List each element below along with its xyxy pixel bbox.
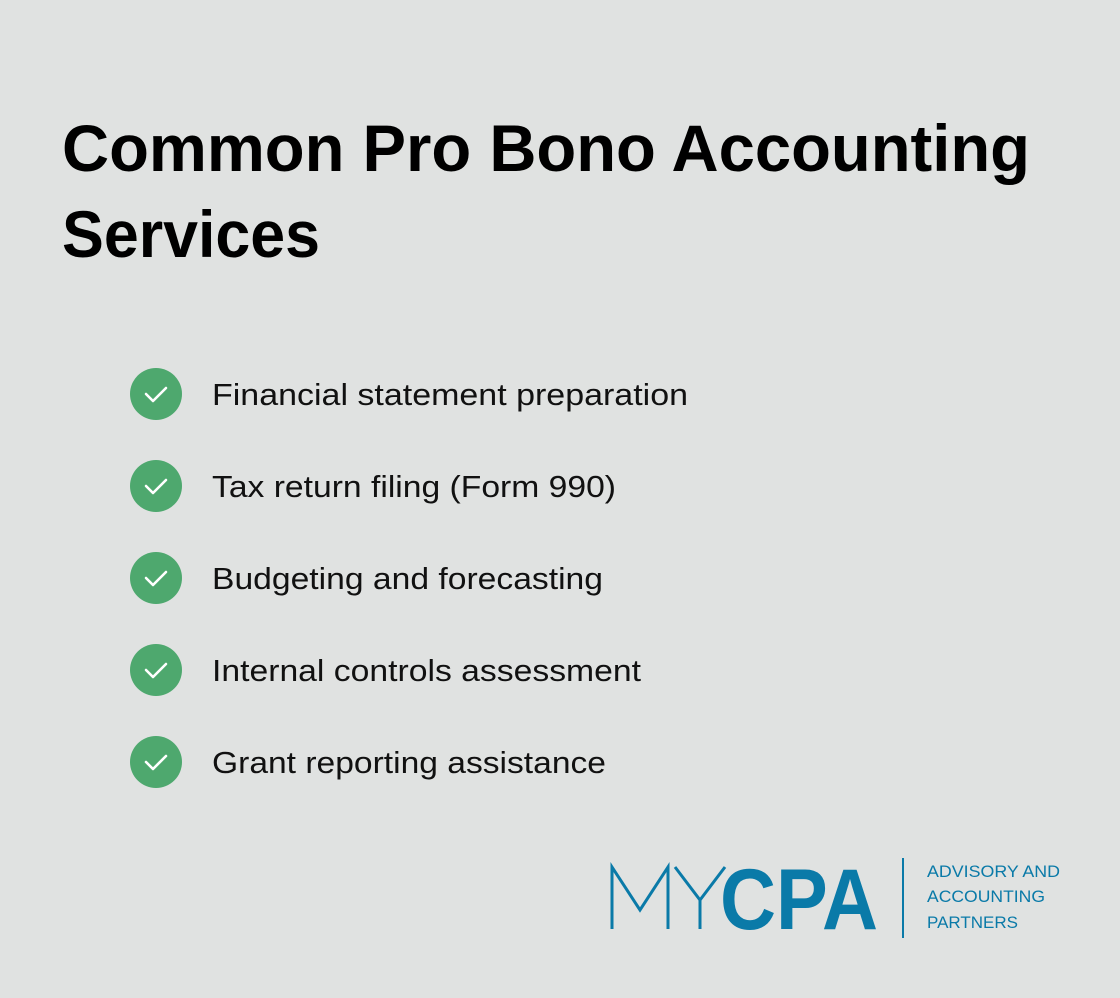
item: Grant reporting assistance: Grant reporting assistance	[212, 745, 606, 780]
logo: tagline	[927, 862, 1060, 932]
title: Common Pro Bono Accounting	[62, 111, 1030, 185]
logo: tagline: PARTNERS	[927, 913, 1018, 932]
item: Budgeting and forecasting: Budgeting and forecasting	[212, 561, 603, 596]
logo: tagline: ACCOUNTING	[927, 887, 1045, 906]
logo	[612, 852, 1060, 948]
logo: CPA: CPA	[720, 852, 878, 948]
item: Financial statement preparation	[130, 368, 688, 420]
title	[62, 111, 1030, 271]
item: Budgeting and forecasting	[130, 552, 603, 604]
item: Financial statement preparation: Financial statement preparation	[212, 377, 688, 412]
item: Internal controls assessment	[130, 644, 641, 696]
logo: tagline: ADVISORY AND	[927, 862, 1060, 881]
title: Services	[62, 197, 320, 271]
item: Tax return filing	[130, 460, 616, 512]
item: Tax return filing: Tax return filing (Form 990)	[212, 469, 616, 504]
checklist	[130, 368, 688, 788]
logo: MY thin letters	[612, 867, 725, 929]
item: Internal controls assessment: Internal controls assessment	[212, 653, 641, 688]
item: Grant reporting assistance	[130, 736, 606, 788]
